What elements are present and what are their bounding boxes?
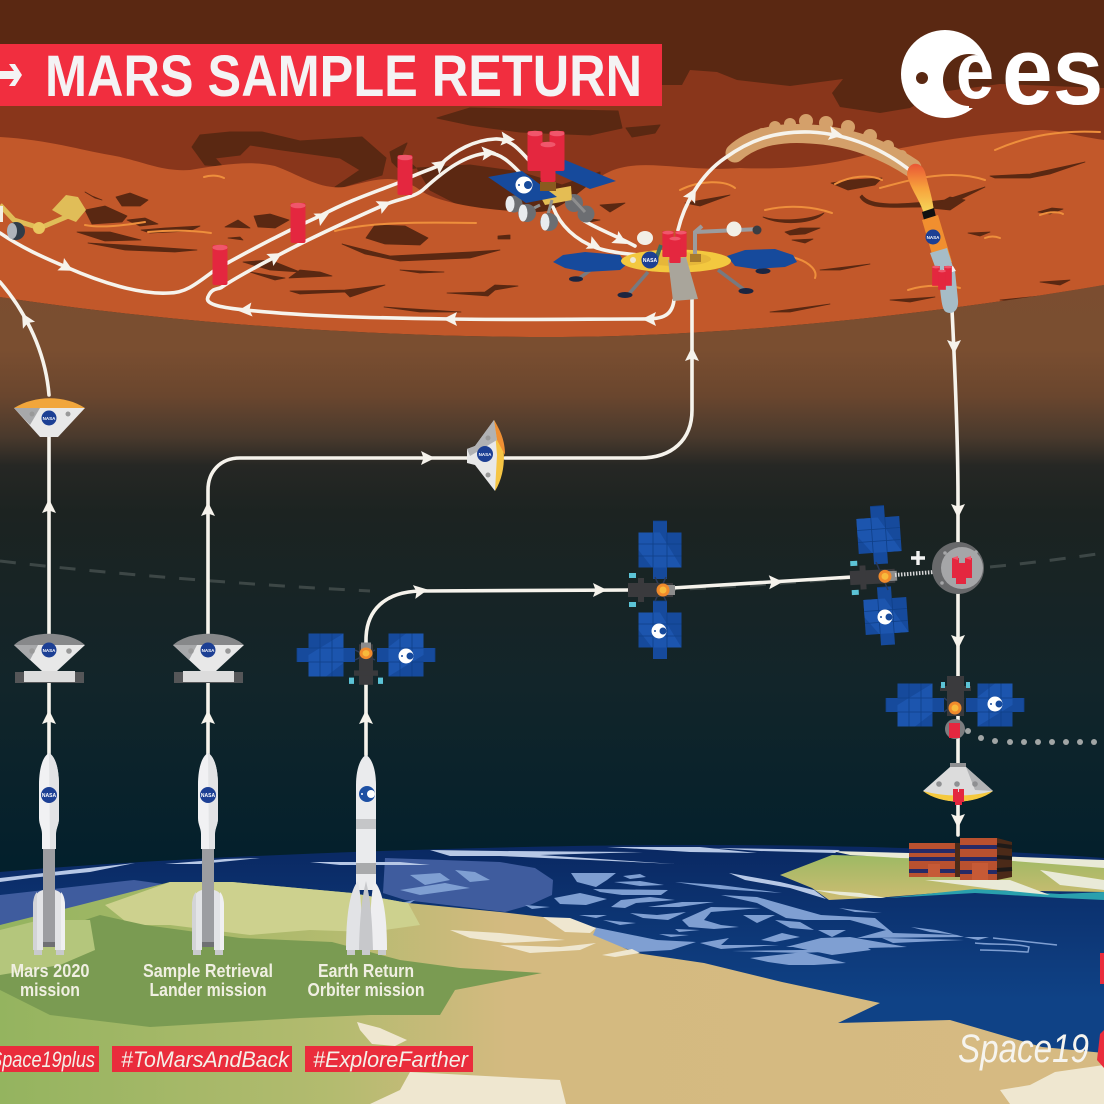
direction arrows bbox=[16, 126, 965, 828]
sample receiving facility bbox=[909, 838, 1012, 880]
background: Mars mid-ground bbox=[0, 70, 1104, 300]
Earth entry capsule bbox=[923, 763, 993, 805]
title text: MARS SAMPLE RETURN bbox=[45, 44, 642, 109]
orbiter at launch bbox=[297, 634, 435, 685]
rocket: Sample Retrieval Lander bbox=[192, 753, 224, 955]
icon: NASA logo bbox=[200, 787, 216, 803]
Mars surface cracks and craters bbox=[77, 162, 1085, 312]
ramp bbox=[668, 257, 698, 301]
sample fetch rover, far left bbox=[0, 195, 86, 240]
icon: ESA logo on rover panel bbox=[516, 176, 532, 194]
sample container under orbiter bbox=[945, 719, 965, 739]
icon: NASA logo on ascent vehicle: NASA bbox=[927, 235, 940, 240]
Mars foreground surface bbox=[0, 130, 1104, 337]
entry capsule, sample retrieval lander: NASA bbox=[479, 452, 492, 457]
Mars distant dark patches bbox=[192, 108, 660, 212]
sample canisters on rover bbox=[528, 131, 564, 191]
orbiter in Earth transfer bbox=[628, 521, 682, 659]
capture mechanism spring bbox=[895, 572, 934, 575]
mission flight paths bbox=[0, 132, 958, 835]
ascent vehicle exhaust cloud bbox=[735, 114, 912, 168]
launch capsule, sample retrieval lander bbox=[173, 634, 244, 683]
Earth ocean bbox=[0, 845, 1104, 1104]
sample canisters on lander bbox=[662, 231, 687, 263]
orbiter capturing samples bbox=[849, 505, 909, 646]
mission label: Mars 2020: mission bbox=[20, 980, 80, 1000]
icon: ESA logo bbox=[988, 696, 1002, 712]
icon: ESA logo bbox=[652, 624, 666, 638]
icon: NASA logo: NASA bbox=[42, 793, 56, 799]
mission label: Sample Retrieval Lander: Sample Retrieval bbox=[143, 961, 273, 981]
icon: NASA logo bbox=[41, 787, 57, 803]
land: pale highlands bbox=[105, 882, 420, 935]
land: dark green lowlands bbox=[0, 915, 542, 1027]
sample retrieval lander bbox=[553, 222, 797, 301]
Mars orange crater highlights bbox=[85, 132, 1100, 290]
snow coastline bbox=[814, 851, 1104, 898]
Earth mid-blue shallow waters bbox=[0, 858, 553, 925]
plus sign bbox=[911, 551, 925, 565]
Earth land, northern continent with launch/landing site bbox=[780, 855, 1104, 900]
Mars orbit dashed line bbox=[0, 553, 1104, 591]
orbiter returning to Earth bbox=[886, 676, 1024, 726]
launch capsule, Mars 2020: NASA bbox=[43, 648, 56, 653]
icon: ESA logo bbox=[359, 786, 375, 802]
launch capsule, sample retrieval lander: NASA bbox=[202, 648, 215, 653]
orbiter disposal dotted path bbox=[965, 728, 1097, 745]
land: light pale marks bbox=[0, 920, 95, 975]
icon: NASA logo: NASA bbox=[201, 793, 215, 799]
ESA logo: e bbox=[956, 26, 994, 115]
icon: ESA logo bbox=[878, 610, 892, 624]
Earth land, western continent bbox=[0, 882, 1104, 1104]
title banner bbox=[0, 44, 662, 109]
cropped red label at right edge bbox=[1100, 953, 1104, 984]
background: Mars sky dark brown bbox=[0, 0, 1104, 340]
orbiting sample container bbox=[932, 542, 984, 594]
icon: ESA logo bbox=[398, 648, 414, 664]
hashtag: ToMarsAndBack: #ToMarsAndBack bbox=[121, 1047, 290, 1072]
icon: arrow in title bbox=[0, 64, 22, 86]
cruise capsule, Mars 2020 arriving bbox=[14, 398, 85, 437]
rocket: Mars 2020 bbox=[33, 753, 65, 955]
hashtag: ExploreFarther: #ExploreFarther bbox=[313, 1047, 470, 1072]
land: snow patches bbox=[357, 917, 1104, 1104]
cruise capsule, Mars 2020 arriving: NASA bbox=[43, 416, 56, 421]
entry capsule, sample retrieval lander bbox=[467, 420, 505, 491]
mission label: Sample Retrieval Lander: Lander mission bbox=[150, 980, 266, 1000]
sample canisters on Mars surface bbox=[212, 155, 412, 285]
icon: NASA logo on ascent vehicle bbox=[926, 230, 940, 244]
Earth ocean ice floes bbox=[390, 870, 989, 965]
rocket: Earth Return Orbiter bbox=[346, 755, 387, 955]
launch capsule, Mars 2020 bbox=[14, 634, 85, 683]
mission label: Earth Return Orbiter: Earth Return bbox=[318, 961, 414, 981]
ice floe loop and streak bbox=[975, 938, 1057, 952]
icon: NASA logo on lander: NASA bbox=[643, 258, 657, 264]
Earth thin cloud streaks bbox=[0, 847, 840, 899]
Mars ascent vehicle with flame bbox=[907, 164, 958, 313]
atmosphere gradient to space bbox=[0, 285, 1104, 880]
mission label: Earth Return Orbiter: Orbiter mission bbox=[308, 980, 424, 1000]
mission label: Mars 2020: Mars 2020 bbox=[10, 961, 90, 981]
ESA logo bbox=[901, 30, 1100, 118]
coastal teal shallows bbox=[886, 889, 1104, 900]
icon: NASA logo on lander bbox=[642, 252, 658, 268]
sample fetch rover with solar panels bbox=[488, 160, 616, 231]
samples on ascent vehicle bbox=[932, 266, 952, 290]
